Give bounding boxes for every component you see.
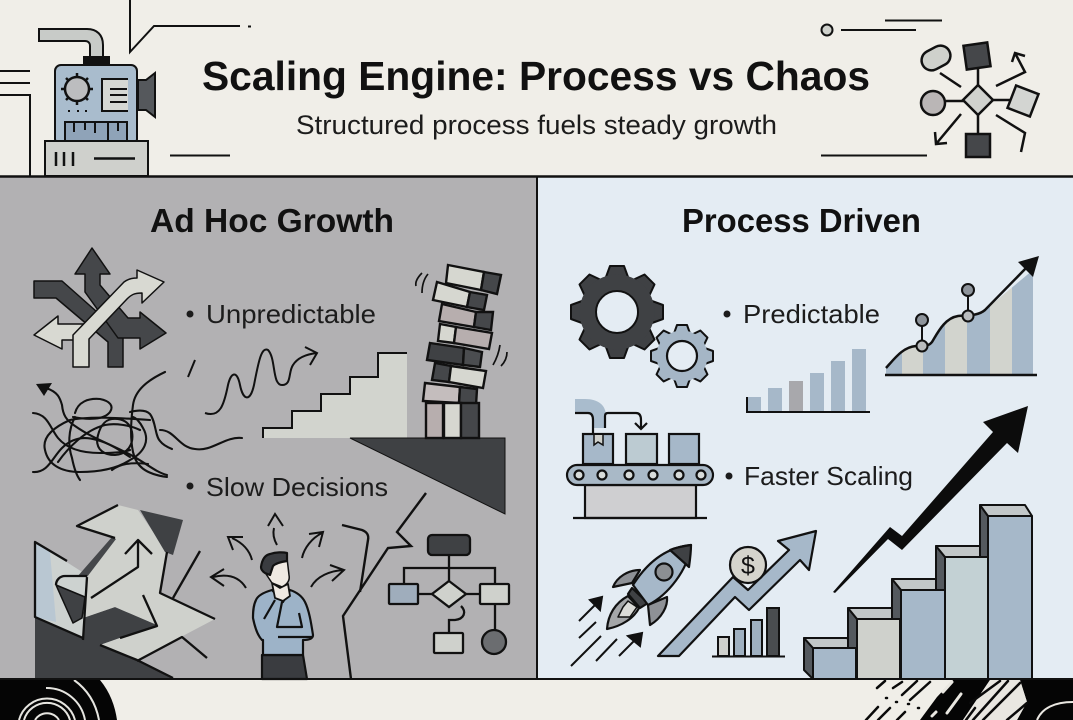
person hand <box>272 583 290 601</box>
subtitle: Structured process fuels steady growth <box>296 110 777 140</box>
icon: wobbling block tower <box>416 265 507 438</box>
panel: ad hoc growth background <box>0 177 537 679</box>
person sweater <box>253 590 313 655</box>
chart: 3d ascending bars <box>804 505 1032 679</box>
conveyor boxes <box>583 434 613 464</box>
big zigzag black arrow <box>833 406 1028 593</box>
icon: large gear <box>571 266 663 358</box>
circle node <box>921 91 945 115</box>
icon: thinking person <box>253 552 313 679</box>
chart: area trend with milestones <box>885 256 1039 375</box>
icon: shattered arrows <box>35 505 215 678</box>
arrow up right <box>996 53 1025 86</box>
icon: crossing direction arrows <box>34 248 166 367</box>
icon: conveyor belt <box>567 399 713 518</box>
machine base <box>45 141 148 176</box>
dark bottom square node <box>966 134 990 157</box>
arrow down left <box>935 114 961 144</box>
icon: staircase <box>263 353 407 438</box>
chart: small bars <box>747 349 870 412</box>
machine sun gauge <box>61 73 93 105</box>
person arms <box>264 600 312 637</box>
light arrow right <box>73 270 164 367</box>
chart: tiny bars <box>712 608 785 656</box>
conveyor feed pipe <box>575 399 606 428</box>
panel: process driven background <box>537 177 1073 679</box>
person legs <box>262 655 307 679</box>
icon: network diagram <box>918 42 1039 157</box>
dark square node <box>963 42 991 70</box>
conveyor rollers <box>574 470 706 480</box>
light square node <box>1007 85 1039 117</box>
crack lines <box>342 493 426 679</box>
rocket window <box>656 564 672 580</box>
heading: process driven: Process Driven <box>682 202 921 239</box>
icon: small node circle <box>822 24 832 36</box>
bullet: predictable: Predictable <box>743 299 880 329</box>
header decorative line group <box>0 0 942 176</box>
conveyor base <box>585 485 696 518</box>
cliff wedge <box>350 438 505 514</box>
bullet: slow decisions: Slow Decisions <box>206 472 388 502</box>
icon: tangled scribble <box>33 372 242 480</box>
machine body <box>55 65 137 145</box>
icon: rocket <box>607 545 691 629</box>
conveyor belt <box>567 465 713 485</box>
panel frame lines <box>0 176 1073 679</box>
machine ruler <box>65 122 127 142</box>
rocket flame <box>607 596 639 629</box>
rocket body <box>633 545 691 605</box>
thought arrows around person <box>211 514 344 588</box>
rocket fins <box>613 570 640 587</box>
icon: flowchart <box>389 535 509 654</box>
icon: wavy arrow <box>188 347 317 414</box>
icon: engine machine <box>39 29 155 176</box>
machine indicator dots <box>68 110 87 112</box>
icon: growth arrow with dollar coin: $ <box>741 552 755 580</box>
machine pipe <box>39 29 103 58</box>
tangled scribble arrowhead <box>36 383 52 396</box>
person hair <box>261 552 287 575</box>
bullet: faster scaling: Faster Scaling <box>744 461 913 491</box>
dark arrow from left to bottom <box>34 281 123 367</box>
pill node <box>918 42 954 74</box>
person face <box>266 558 289 587</box>
bullet: unpredictable: Unpredictable <box>206 299 376 329</box>
machine flange <box>84 57 109 64</box>
footer: black swirl left <box>0 680 117 720</box>
title: Scaling Engine: Process vs Chaos <box>202 53 870 99</box>
machine display panel <box>102 79 128 111</box>
heading: ad hoc growth: Ad Hoc Growth <box>150 202 394 239</box>
diamond node <box>963 85 993 115</box>
dark arrow up and right <box>75 248 166 349</box>
footer: hatched pattern right <box>866 680 1073 720</box>
rocket nose <box>670 545 691 567</box>
rocket neck <box>628 588 648 608</box>
speed arrows <box>571 597 642 666</box>
light arrow left <box>34 316 85 349</box>
machine speaker <box>138 73 155 117</box>
icon: growth arrow with dollar coin <box>658 531 816 656</box>
icon: small gear <box>651 325 713 387</box>
